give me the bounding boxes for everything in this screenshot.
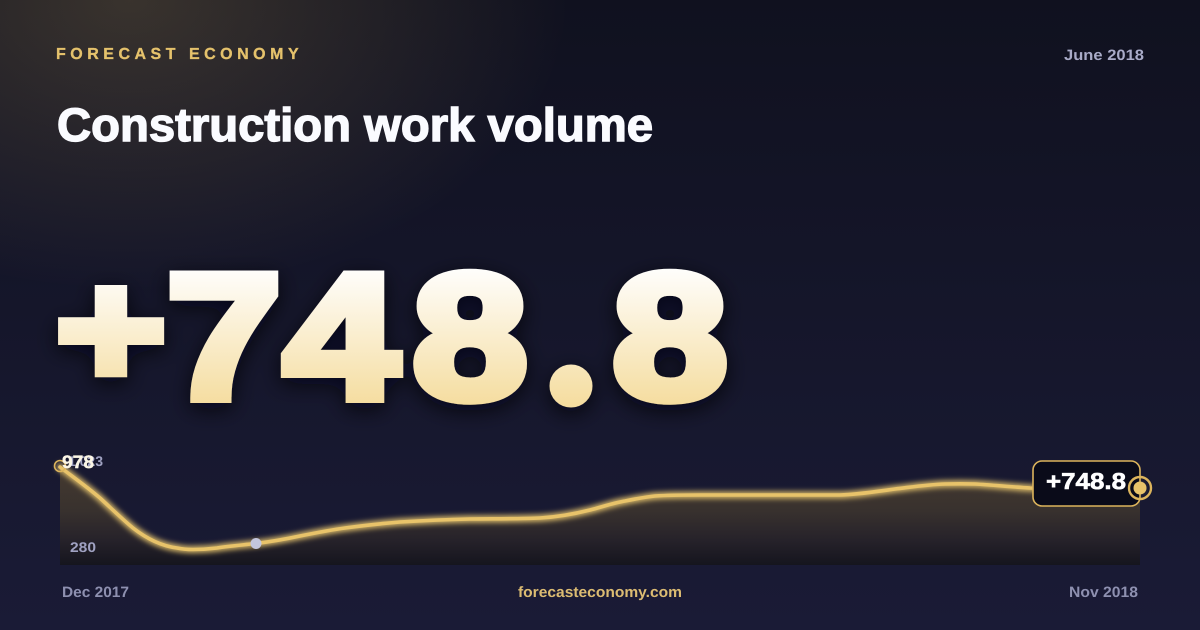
axis maximum label: 1,023	[68, 453, 103, 469]
area under line	[60, 467, 1140, 565]
hero value: 4	[284, 237, 399, 436]
date label: June 2018	[1064, 47, 1144, 64]
hero value: 7	[167, 237, 282, 436]
axis minimum label: 280	[70, 539, 96, 555]
title: Construction work volume	[57, 98, 653, 151]
sparkline chart	[54, 452, 1151, 565]
hero value	[56, 237, 728, 436]
axis end date: Nov 2018	[1069, 584, 1138, 601]
start value label: 978	[62, 452, 94, 472]
midpoint marker	[250, 538, 262, 549]
start marker ring	[54, 460, 66, 472]
source website: forecasteconomy.com	[518, 584, 682, 601]
end value callout: +748.8	[1046, 468, 1126, 494]
eyebrow: brand name: FORECAST ECONOMY	[56, 46, 303, 63]
hero value: 8	[413, 237, 528, 436]
data line	[60, 467, 1140, 550]
end value callout	[1033, 461, 1140, 506]
axis start date: Dec 2017	[62, 584, 129, 601]
hero value: 8	[612, 237, 728, 436]
end marker	[1129, 477, 1151, 499]
hero value: +	[56, 239, 166, 420]
line glow	[60, 467, 1140, 550]
hero value: .	[542, 237, 600, 436]
